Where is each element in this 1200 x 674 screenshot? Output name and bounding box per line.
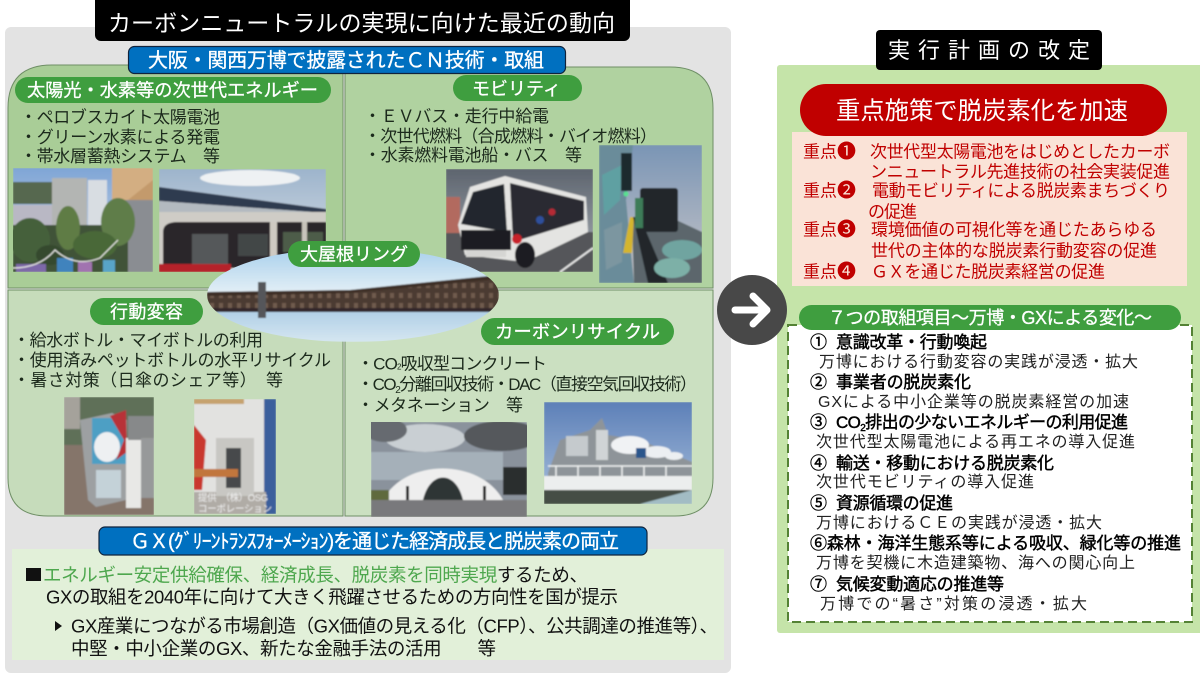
priority 4: 重点❹ <box>803 260 856 282</box>
recycling list <box>357 354 697 415</box>
item 1: 万博における行動変容の実践が浸透・拡大 <box>819 353 1138 371</box>
panel: mobility <box>345 67 713 288</box>
photo credit: 提供 （株）OSG <box>198 492 268 504</box>
behavior list <box>13 331 331 390</box>
mobility list: ・水素燃料電池船・バス 等 <box>364 146 582 165</box>
energy list: ・ペロブスカイト太陽電池 <box>20 107 220 127</box>
GX text: 中堅・中小企業のGX、新たな金融手法の活用 等 <box>71 638 496 659</box>
item 2: ② <box>810 373 827 392</box>
behavior list: ・使用済みペットボトルの水平リサイクル <box>13 350 331 370</box>
priority 2: の促進 <box>868 202 917 222</box>
recycling list: ・メタネーション 等 <box>357 396 523 415</box>
GX text: GX産業につながる市場創造（GX価値の見える化（CFP）、公共調達の推進等）、 <box>71 616 718 636</box>
ring pill <box>288 241 420 267</box>
priority 2: 電動モビリティによる脱炭素まちづくり <box>872 182 1170 200</box>
GX text: GXの取組を2040年に向けて大きく飛躍させるための方向性を国が提示 <box>46 586 618 608</box>
photo: hydrogen sign and plants <box>10 168 153 272</box>
recycling list: ・CO2吸収型コンクリート <box>357 354 547 374</box>
item 6: ⑥森林・海洋生態系等による吸収、緑化等の推進 <box>810 534 1181 553</box>
title: left <box>95 0 630 41</box>
mobility list: ・次世代燃料（合成燃料・バイオ燃料） <box>364 127 657 146</box>
light green box: GX <box>12 549 724 660</box>
item 5: 万博におけるＣＥの実践が浸透・拡大 <box>816 514 1102 532</box>
GX text: エネルギー安定供給確保、経済成長、脱炭素を同時実現するため、 <box>43 564 588 586</box>
priority 4 <box>803 260 1105 282</box>
recycling list: 2 <box>395 385 401 396</box>
priority 1: ンニュートラル先進技術の社会実装促進 <box>870 162 1170 182</box>
recycling pill <box>481 318 674 345</box>
recycling pill: カーボンリサイクル <box>495 321 660 342</box>
priority 1: 次世代型太陽電池をはじめとしたカーボ <box>870 142 1170 162</box>
behavior list: ・給水ボトル・マイボトルの利用 <box>13 331 263 350</box>
dashed box: seven items <box>788 325 1192 622</box>
mobility pill: モビリティ <box>472 79 561 99</box>
item 4: ④ <box>810 454 827 473</box>
recycling list: ・CO <box>357 375 397 394</box>
item 3: 排出の少ないエネルギーの利用促進 <box>865 413 1128 432</box>
pink box: priorities <box>792 132 1187 286</box>
mobility list: ・ＥＶバス・走行中給電 <box>364 107 549 126</box>
item 6: 万博を契機に木造建築物、海への関心向上 <box>816 554 1135 572</box>
item 4: 輸送・移動における脱炭素化 <box>836 454 1054 473</box>
priority 3 <box>803 218 1157 260</box>
photo: grand ring <box>207 241 499 342</box>
panel: recent trends <box>5 27 731 673</box>
recycling list: 分離回収技術・DAC（直接空気回収技術） <box>399 375 697 394</box>
item 1 <box>810 333 1138 371</box>
energy pill: 太陽光・水素等の次世代エネルギー <box>27 80 318 100</box>
photo: dome <box>371 422 527 517</box>
title: action plan: 実行計画の改定 <box>888 38 1090 63</box>
item 7: 気候変動適応の推進等 <box>836 575 1004 594</box>
item 3: 次世代型太陽電池による再エネの導入促進 <box>816 432 1135 451</box>
item 5 <box>810 494 1102 532</box>
title: left: カーボンニュートラルの実現に向けた最近の動向 <box>108 10 615 36</box>
item 5: 資源循環の促進 <box>836 494 953 513</box>
priority 1: 重点❶ <box>803 140 856 162</box>
priority 4: ＧＸを通じた脱炭素経営の促進 <box>871 262 1105 282</box>
photo: electric bus <box>446 169 593 272</box>
item 7: ⑦ <box>810 575 827 594</box>
item 7: 万博での“暑さ”対策の浸透・拡大 <box>820 595 1087 613</box>
item 3: CO <box>836 413 861 432</box>
ring pill: 大屋根リング <box>300 244 408 264</box>
title: action plan <box>876 30 1102 70</box>
item 4 <box>810 454 1054 491</box>
panel: behavior change <box>8 290 343 516</box>
GX text <box>26 564 718 659</box>
priority 3: 重点❸ <box>803 218 856 240</box>
red pill <box>800 84 1167 136</box>
priority 2 <box>803 180 1170 222</box>
energy list: ・帯水層蓄熱システム 等 <box>20 147 220 166</box>
photo: wireless charging road <box>599 145 702 283</box>
item 3 <box>810 413 1135 451</box>
photo: solar roof and bus <box>159 169 326 272</box>
photo: water station <box>194 399 276 515</box>
panel: action plan <box>777 65 1200 633</box>
photo: methanation plant <box>544 402 692 504</box>
behavior pill <box>90 298 203 325</box>
behavior list: ・暑さ対策（日傘のシェア等） 等 <box>13 371 283 390</box>
item 3: 2 <box>860 423 866 434</box>
arrow <box>717 275 787 345</box>
heading bar: GX: ＧＸ(ｸﾞﾘｰﾝﾄﾗﾝｽﾌｫｰﾒｰｼｮﾝ)を通じた経済成長と脱炭素の両立 <box>130 530 619 553</box>
item 5: ⑤ <box>810 494 827 513</box>
photo: bottle recycling box <box>64 397 154 515</box>
green pill: seven items: ７つの取組項目～万博・GXによる変化～ <box>828 308 1152 328</box>
item 2: GXによる中小企業等の脱炭素経営の加速 <box>818 393 1129 411</box>
photo credit: コーポレーション <box>198 504 272 515</box>
red pill: 重点施策で脱炭素化を加速 <box>836 98 1128 125</box>
panel: carbon recycling <box>345 290 713 517</box>
panel: energy <box>8 65 343 288</box>
item 1: ① <box>810 333 827 352</box>
photo credit <box>198 492 272 515</box>
item 2: 事業者の脱炭素化 <box>836 373 971 392</box>
green pill: seven items <box>799 305 1181 330</box>
item 7 <box>810 575 1087 613</box>
mobility list <box>364 107 657 165</box>
item 4: 次世代モビリティの導入促進 <box>816 472 1034 491</box>
priority 3: 環境価値の可視化等を通じたあらゆる <box>871 220 1157 240</box>
item 6 <box>810 534 1181 572</box>
heading bar: expo: 大阪・関西万博で披露されたＣＮ技術・取組 <box>148 49 544 72</box>
priority 2: 重点❷ <box>803 180 856 202</box>
item 1: 意識改革・行動喚起 <box>836 333 987 352</box>
item 3: ③ <box>810 413 827 432</box>
energy list <box>20 107 220 166</box>
mobility pill <box>453 75 582 101</box>
energy list: ・グリーン水素による発電 <box>20 128 220 147</box>
priority 3: 世代の主体的な脱炭素行動変容の促進 <box>871 242 1157 260</box>
priority 1 <box>803 140 1170 182</box>
item 2 <box>810 373 1129 411</box>
behavior pill: 行動変容 <box>110 302 183 322</box>
